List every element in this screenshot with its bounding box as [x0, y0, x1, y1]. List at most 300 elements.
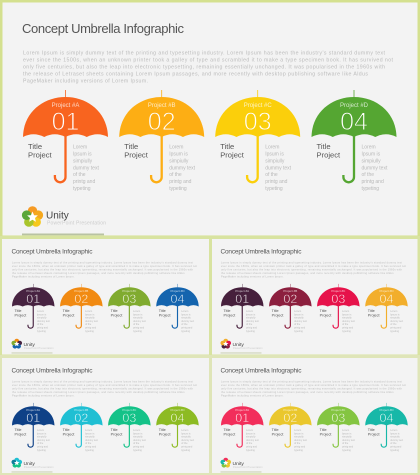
- body paragraph: Lorem Ipsum is simply dummy text of the printing and typesetting industry. Lorem Ipsum has been the industry's standard dummy text: [12, 262, 193, 265]
- umbrella: project C: Project #C: [331, 289, 346, 293]
- umbrella: project B: [60, 284, 103, 333]
- umbrella: project D: Ipsum is: [181, 432, 191, 435]
- logo wordmark: [24, 342, 54, 350]
- umbrella: project A: printg and: [246, 327, 258, 330]
- umbrella: project A: Project #A: [26, 289, 40, 293]
- umbrella: project C: Project: [111, 313, 122, 317]
- umbrella: project D: simpiully: [390, 436, 401, 439]
- umbrella: project D: Project #D: [171, 289, 184, 293]
- umbrella: project C: dummy text: [133, 320, 146, 323]
- slide: crimson palette: [220, 248, 408, 353]
- umbrella: project A: of the: [73, 172, 86, 178]
- umbrella: project D: Project #D: [380, 289, 393, 293]
- umbrella: project B: dummy text: [85, 439, 98, 442]
- umbrella: project A: typeting: [246, 449, 255, 452]
- umbrella: project C: Lorem: [342, 310, 349, 313]
- body paragraph: ever since the 1500s, when an unknown printer took a galley of type and scrambled it to make a type specimen book. It has survived not: [221, 384, 406, 387]
- umbrella: project D: 04: [171, 411, 185, 425]
- umbrella: project D: 04: [171, 292, 185, 306]
- umbrella: project C: simpiully: [265, 158, 285, 164]
- logo wordmark: Unity: [46, 210, 69, 222]
- umbrella: project D: [365, 403, 408, 452]
- umbrella: project B: Ipsum is: [169, 152, 188, 158]
- logo wordmark: Unity: [233, 342, 244, 348]
- umbrella: project B: simpiully: [85, 317, 95, 320]
- umbrella: project D: Title: [159, 428, 166, 432]
- umbrella: project D: Lorem: [181, 429, 188, 432]
- logo wordmark: PowerPoint Presentation: [24, 466, 54, 469]
- body paragraph: ever since the 1500s, when an unknown printer took a galley of type and scrambled it to make a type specimen book. It has survived not: [221, 265, 406, 268]
- umbrella: project A: printg and: [246, 446, 258, 449]
- umbrella: project A: dummy text: [73, 165, 99, 171]
- umbrella: project B: Lorem: [85, 429, 92, 432]
- slide: bright palette: [220, 367, 408, 472]
- umbrella: project A: simpiully: [73, 158, 93, 164]
- umbrella: project B: dummy text: [294, 320, 307, 323]
- umbrella: project C: printg and: [342, 446, 354, 449]
- umbrella: project B: [269, 284, 312, 333]
- umbrella: project C: Ipsum is: [133, 432, 143, 435]
- title: Concept Umbrella Infographic: [221, 367, 302, 374]
- umbrella: project A: Project: [28, 150, 53, 160]
- logo wordmark: [24, 461, 54, 469]
- umbrella: project A: dummy text: [246, 439, 259, 442]
- umbrella: project C: dummy text: [133, 439, 146, 442]
- slide frame: plum palette: [0, 236, 210, 357]
- umbrella: project D: 04: [380, 411, 394, 425]
- umbrella: project B: simpiully: [169, 158, 189, 164]
- umbrella: project A: Project #A: [52, 103, 79, 109]
- logo wordmark: Unity: [24, 342, 35, 348]
- body paragraph: [12, 262, 197, 279]
- umbrella: project D: dummy text: [181, 439, 194, 442]
- body paragraph: only five centuries, but also the leap into electronic typesetting, remaining essentially unchanged. It was popularised in the 1960s with: [221, 388, 403, 391]
- umbrella: project C: 03: [331, 411, 345, 425]
- umbrella: project A: Lorem: [37, 310, 44, 313]
- umbrella: project D: dummy text: [362, 165, 388, 171]
- umbrella: project B: Title: [124, 142, 138, 151]
- umbrella: project C: Title: [220, 142, 234, 151]
- umbrella: project D: Ipsum is: [362, 152, 381, 158]
- umbrella: project D: 04: [380, 292, 394, 306]
- umbrella: project D: Project #D: [380, 408, 393, 412]
- logo: Unity flower: [220, 339, 231, 349]
- body paragraph: the release of Letraset sheets containing Lorem Ipsum passages, and more recently with desktop publishing software like Aldus: [221, 272, 394, 275]
- logo wordmark: Unity: [24, 461, 35, 467]
- umbrella: project B: Lorem: [169, 144, 183, 150]
- body paragraph: only five centuries, but also the leap into electronic typesetting, remaining essentially unchanged. It was popularised in the 1960s with: [221, 269, 403, 272]
- umbrella: project D: Project: [159, 313, 171, 317]
- slide: main concept umbrella: [22, 21, 397, 235]
- umbrella: project B: of the: [169, 172, 182, 178]
- umbrella: project B: of the: [294, 442, 301, 445]
- umbrella: project B: Ipsum is: [85, 432, 95, 435]
- umbrella: project A: simpiully: [37, 436, 47, 439]
- umbrella: project D: typeting: [390, 449, 400, 452]
- umbrella: project A: Project: [14, 313, 26, 317]
- umbrella: project B: [269, 403, 312, 452]
- body paragraph: ever since the 1500s, when an unknown printer took a galley of type and scrambled it to make a type specimen book. It has survived not: [23, 57, 394, 63]
- umbrella: project B: Title: [63, 428, 70, 432]
- body paragraph: Lorem Ipsum is simply dummy text of the printing and typesetting industry. Lorem Ipsum has been the industry's standard dummy text: [221, 262, 402, 265]
- umbrella: project C: Project #C: [331, 408, 346, 412]
- body paragraph: PageMaker including versions of Lorem Ipsum.: [12, 276, 75, 279]
- umbrella: project C: Title: [320, 428, 327, 432]
- title: Concept Umbrella Infographic: [22, 21, 184, 36]
- slide frame: crimson palette: [210, 236, 420, 357]
- umbrella: project B: of the: [294, 323, 301, 326]
- umbrella: project A: typeting: [37, 449, 46, 452]
- logo wordmark: [232, 461, 263, 469]
- umbrella: project C: [317, 403, 360, 452]
- umbrella: project B: Project: [63, 313, 74, 317]
- umbrella: project D: Ipsum is: [390, 432, 400, 435]
- umbrella: project A: Ipsum is: [73, 152, 92, 158]
- body paragraph: the release of Letraset sheets containing Lorem Ipsum passages, and more recently with desktop publishing software like Aldus: [12, 391, 185, 394]
- umbrella: project C: of the: [342, 323, 349, 326]
- umbrella: project B: dummy text: [294, 439, 307, 442]
- umbrella: project B: Project: [63, 432, 74, 436]
- umbrella: project B: of the: [85, 323, 92, 326]
- umbrella: project B: dummy text: [169, 165, 196, 171]
- umbrella: project A: Ipsum is: [37, 313, 47, 316]
- logo wordmark: Unity: [233, 461, 244, 467]
- logo wordmark: PowerPoint Presentation: [24, 347, 54, 350]
- umbrella: project A: Project #A: [235, 289, 249, 293]
- umbrella: project A: dummy text: [246, 320, 259, 323]
- umbrella: project D: printg and: [390, 327, 402, 330]
- umbrella: project D: typeting: [390, 330, 400, 333]
- umbrella: project B: of the: [85, 442, 92, 445]
- footer bar: [220, 352, 262, 354]
- umbrella: project C: typeting: [133, 330, 142, 333]
- umbrella: project D: Project #D: [171, 408, 184, 412]
- umbrella: project C: typeting: [265, 186, 283, 192]
- umbrella: project C: dummy text: [265, 165, 292, 171]
- umbrella: project A: printg and: [37, 446, 49, 449]
- umbrella: project C: [215, 90, 300, 192]
- umbrella: project B: Lorem: [294, 429, 301, 432]
- umbrella: project B: 02: [74, 411, 88, 425]
- umbrella: project B: Project: [272, 313, 283, 317]
- umbrella: project B: typeting: [85, 330, 94, 333]
- umbrella: project C: Lorem: [133, 310, 140, 313]
- logo: Unity flower: [11, 339, 22, 349]
- umbrella: project B: [60, 403, 103, 452]
- slide frame: blue-teal palette: [0, 355, 210, 475]
- umbrella: project D: dummy text: [390, 320, 403, 323]
- umbrella: project C: printg and: [342, 327, 354, 330]
- umbrella: project A: Title: [14, 309, 22, 313]
- umbrella: project C: printg and: [133, 446, 145, 449]
- body paragraph: Lorem Ipsum is simply dummy text of the printing and typesetting industry. Lorem Ipsum has been the industry's standard dummy text: [23, 50, 386, 56]
- umbrella: project A: printg and: [73, 179, 95, 185]
- umbrella: project B: Project #B: [74, 408, 88, 412]
- body paragraph: [23, 50, 394, 84]
- umbrella: project A: Project: [224, 432, 235, 436]
- umbrella: project A: Project: [14, 432, 26, 436]
- umbrella: project C: of the: [133, 323, 140, 326]
- umbrella: project A: dummy text: [37, 439, 50, 442]
- title: Concept Umbrella Infographic: [12, 248, 93, 255]
- umbrella: project C: simpiully: [133, 436, 143, 439]
- umbrella: project C: Project: [111, 432, 122, 436]
- umbrella: project B: Project #B: [148, 103, 176, 109]
- umbrella: project B: typeting: [294, 449, 303, 452]
- umbrella: project C: of the: [342, 442, 349, 445]
- umbrella: project D: dummy text: [390, 439, 403, 442]
- umbrella: project C: Ipsum is: [133, 313, 143, 316]
- umbrella: project D: [312, 90, 396, 192]
- umbrella: project C: Ipsum is: [265, 152, 284, 158]
- logo wordmark: PowerPoint Presentation: [233, 347, 263, 350]
- logo wordmark: [232, 342, 263, 350]
- umbrella: project D: simpiully: [181, 317, 192, 320]
- umbrella: project C: Ipsum is: [342, 313, 352, 316]
- umbrella: project A: [12, 284, 54, 333]
- umbrella: project A: Project: [224, 313, 235, 317]
- umbrella: project C: Project #C: [122, 289, 137, 293]
- slide: plum palette: [11, 248, 199, 353]
- slide: blue-teal palette: [11, 367, 199, 472]
- umbrella: project A: Title: [224, 428, 231, 432]
- umbrella: project B: printg and: [85, 446, 97, 449]
- body paragraph: [221, 262, 406, 279]
- umbrella: project C: [108, 403, 151, 452]
- umbrella: project B: Ipsum is: [294, 313, 304, 316]
- umbrella: project D: printg and: [362, 179, 384, 185]
- umbrella: project A: typeting: [246, 330, 255, 333]
- umbrella: project D: of the: [362, 172, 374, 178]
- umbrella: project D: Lorem: [181, 310, 188, 313]
- umbrella: project D: typeting: [181, 330, 191, 333]
- logo wordmark: PowerPoint Presentation: [47, 220, 106, 226]
- umbrella: project B: Project #B: [74, 289, 88, 293]
- umbrella: project B: Lorem: [294, 310, 301, 313]
- umbrella: project D: Lorem: [390, 429, 397, 432]
- umbrella: project D: Project: [316, 150, 341, 160]
- umbrella: project C: simpiully: [342, 436, 352, 439]
- umbrella: project D: Project: [368, 313, 380, 317]
- umbrella: project B: 02: [283, 411, 297, 425]
- footer bar: [220, 471, 262, 473]
- umbrella: project C: Lorem: [133, 429, 140, 432]
- umbrella: project C: Ipsum is: [342, 432, 352, 435]
- umbrella: project C: typeting: [342, 330, 351, 333]
- umbrella: project A: Lorem: [246, 310, 253, 313]
- body paragraph: [12, 381, 197, 398]
- umbrella: project B: Title: [272, 309, 279, 313]
- umbrella: project C: typeting: [133, 449, 142, 452]
- umbrella: project A: 01: [235, 292, 249, 306]
- umbrella: project B: simpiully: [294, 436, 304, 439]
- umbrella: project B: 02: [74, 292, 88, 306]
- umbrella: project B: Ipsum is: [85, 313, 95, 316]
- umbrella: project B: printg and: [294, 446, 306, 449]
- logo: Unity flower: [220, 458, 231, 468]
- body paragraph: ever since the 1500s, when an unknown printer took a galley of type and scrambled it to make a type specimen book. It has survived not: [12, 265, 197, 268]
- umbrella: project A: Lorem: [73, 144, 87, 150]
- umbrella: project C: printg and: [265, 179, 288, 185]
- umbrella: project D: Title: [368, 309, 375, 313]
- umbrella: project C: printg and: [133, 327, 145, 330]
- umbrella: project A: Ipsum is: [246, 432, 256, 435]
- umbrella: project A: [12, 403, 54, 452]
- umbrella: project D: typeting: [362, 186, 379, 192]
- umbrella: project B: Project: [272, 432, 283, 436]
- umbrella: project B: typeting: [169, 186, 187, 192]
- logo wordmark: [46, 210, 106, 226]
- umbrella: project B: dummy text: [85, 320, 98, 323]
- umbrella: project A: of the: [37, 442, 44, 445]
- umbrella: project B: Ipsum is: [294, 432, 304, 435]
- umbrella: project D: of the: [390, 323, 397, 326]
- umbrella: project D: Ipsum is: [390, 313, 400, 316]
- umbrella: project D: typeting: [181, 449, 191, 452]
- umbrella: project D: simpiully: [181, 436, 192, 439]
- umbrella: project A: Ipsum is: [37, 432, 47, 435]
- umbrella: project D: simpiully: [362, 158, 381, 164]
- umbrella: project A: Title: [224, 309, 231, 313]
- umbrella: project C: Project: [320, 432, 331, 436]
- title: Concept Umbrella Infographic: [221, 248, 302, 255]
- umbrella: project A: typeting: [37, 330, 46, 333]
- umbrella: project C: 03: [244, 108, 272, 136]
- umbrella: project B: typeting: [85, 449, 94, 452]
- umbrella: project C: Title: [111, 428, 118, 432]
- umbrella: project D: Project: [159, 432, 171, 436]
- umbrella: project B: 02: [283, 292, 297, 306]
- umbrella: project B: Project #B: [283, 408, 297, 412]
- logo: Unity flower: [22, 206, 43, 227]
- umbrella: project C: Project: [320, 313, 331, 317]
- umbrella: project C: [317, 284, 360, 333]
- umbrella: project A: 01: [26, 292, 40, 306]
- slide frame: main: [0, 0, 420, 238]
- umbrella: project D: [365, 284, 408, 333]
- body paragraph: only five centuries, but also the leap into electronic typesetting, remaining essentially unchanged. It was popularised in the 1960s with: [12, 388, 194, 391]
- umbrella: project B: 02: [148, 108, 176, 136]
- umbrella: project A: simpiully: [246, 317, 256, 320]
- umbrella: project C: simpiully: [342, 317, 352, 320]
- umbrella: project D: of the: [181, 323, 188, 326]
- umbrella: project D: printg and: [390, 446, 402, 449]
- umbrella: project A: Lorem: [37, 429, 44, 432]
- umbrella: project D: 04: [340, 108, 368, 136]
- umbrella: project C: of the: [133, 442, 140, 445]
- umbrella: project A: Title: [28, 142, 42, 151]
- umbrella: project A: of the: [246, 323, 253, 326]
- umbrella: project C: [108, 284, 151, 333]
- umbrella: project C: Project: [220, 150, 245, 160]
- umbrella: project D: Title: [316, 142, 331, 151]
- slide frame: bright palette: [210, 355, 420, 475]
- footer bar: [12, 471, 52, 473]
- umbrella: project D: Title: [159, 309, 166, 313]
- umbrella: project B: Project #B: [283, 289, 297, 293]
- umbrella: project B: printg and: [169, 179, 192, 185]
- umbrella: project D: Lorem: [390, 310, 397, 313]
- umbrella: project D: dummy text: [181, 320, 194, 323]
- umbrella: project C: Lorem: [342, 429, 349, 432]
- umbrella: project D: Project #D: [340, 103, 369, 109]
- body paragraph: PageMaker including versions of Lorem Ipsum.: [23, 78, 148, 84]
- title: Concept Umbrella Infographic: [12, 367, 93, 374]
- body paragraph: the release of Letraset sheets containing Lorem Ipsum passages, and more recently with desktop publishing software like Aldus: [23, 71, 368, 77]
- umbrella: project C: of the: [265, 172, 278, 178]
- umbrella: project A: Ipsum is: [246, 313, 256, 316]
- umbrella: project C: 03: [331, 292, 345, 306]
- umbrella: project B: [119, 90, 204, 192]
- umbrella: project A: simpiully: [246, 436, 256, 439]
- umbrella: project A: Project #A: [235, 408, 249, 412]
- umbrella: project D: Title: [368, 428, 375, 432]
- umbrella: project B: printg and: [294, 327, 306, 330]
- umbrella: project D: simpiully: [390, 317, 401, 320]
- umbrella: project C: Project #C: [244, 103, 272, 109]
- body paragraph: PageMaker including versions of Lorem Ipsum.: [12, 395, 75, 398]
- umbrella: project A: simpiully: [37, 317, 47, 320]
- umbrella: project D: of the: [181, 442, 188, 445]
- footer bar: [12, 352, 52, 354]
- body paragraph: Lorem Ipsum is simply dummy text of the printing and typesetting industry. Lorem Ipsum has been the industry's standard dummy text: [12, 381, 193, 384]
- umbrella: project A: of the: [246, 442, 253, 445]
- umbrella: project A: typeting: [73, 186, 91, 192]
- logo wordmark: PowerPoint Presentation: [233, 466, 263, 469]
- umbrella: project B: printg and: [85, 327, 97, 330]
- umbrella: project B: simpiully: [85, 436, 95, 439]
- umbrella: project A: 01: [52, 108, 79, 136]
- umbrella: project D: [156, 284, 199, 333]
- umbrella: project A: [221, 284, 264, 333]
- umbrella: project C: 03: [122, 292, 136, 306]
- umbrella: project D: printg and: [181, 446, 193, 449]
- body paragraph: only five centuries, but also the leap into electronic typesetting, remaining essentially unchanged. It was popularised in the 1960s with: [23, 64, 385, 70]
- umbrella: project A: 01: [26, 411, 40, 425]
- umbrella: project D: printg and: [181, 327, 193, 330]
- umbrella: project B: simpiully: [294, 317, 304, 320]
- umbrella: project C: typeting: [342, 449, 351, 452]
- body paragraph: Lorem Ipsum is simply dummy text of the printing and typesetting industry. Lorem Ipsum has been the industry's standard dummy text: [221, 381, 402, 384]
- umbrella: project D: Lorem: [362, 144, 376, 150]
- umbrella: project B: Title: [272, 428, 279, 432]
- body paragraph: only five centuries, but also the leap into electronic typesetting, remaining essentially unchanged. It was popularised in the 1960s with: [12, 269, 194, 272]
- umbrella: project C: Title: [320, 309, 327, 313]
- umbrella: project D: [156, 403, 199, 452]
- umbrella: project C: Project #C: [122, 408, 137, 412]
- umbrella: project C: 03: [122, 411, 136, 425]
- umbrella: project C: Title: [111, 309, 118, 313]
- umbrella: project B: Project: [124, 150, 149, 160]
- umbrella: project C: Lorem: [265, 144, 279, 150]
- umbrella: project A: Title: [14, 428, 22, 432]
- umbrella: project D: Project: [368, 432, 380, 436]
- body paragraph: PageMaker including versions of Lorem Ipsum.: [221, 395, 284, 398]
- umbrella: project C: dummy text: [342, 320, 355, 323]
- umbrella: project D: Ipsum is: [181, 313, 191, 316]
- umbrella: project C: simpiully: [133, 317, 143, 320]
- umbrella: project B: Lorem: [85, 310, 92, 313]
- umbrella: project B: Title: [63, 309, 70, 313]
- body paragraph: the release of Letraset sheets containing Lorem Ipsum passages, and more recently with desktop publishing software like Aldus: [221, 391, 394, 394]
- body paragraph: ever since the 1500s, when an unknown printer took a galley of type and scrambled it to make a type specimen book. It has survived not: [12, 384, 197, 387]
- umbrella: project A: 01: [235, 411, 249, 425]
- body paragraph: the release of Letraset sheets containing Lorem Ipsum passages, and more recently with desktop publishing software like Aldus: [12, 272, 185, 275]
- umbrella: project A: Lorem: [246, 429, 253, 432]
- umbrella: project A: [221, 403, 264, 452]
- body paragraph: PageMaker including versions of Lorem Ipsum.: [221, 276, 284, 279]
- umbrella: project D: of the: [390, 442, 397, 445]
